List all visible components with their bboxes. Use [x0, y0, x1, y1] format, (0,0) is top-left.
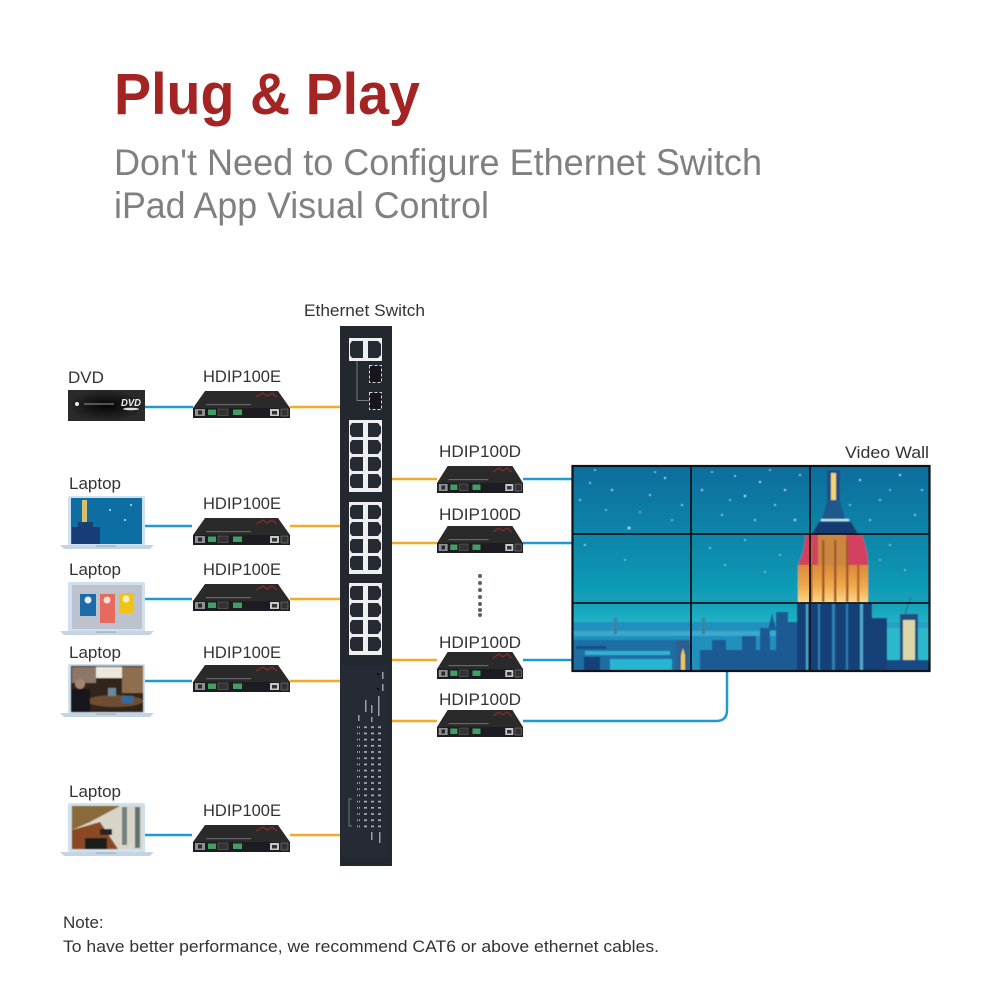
source: Laptop 3: Laptop — [69, 643, 121, 662]
encoder: HDIP100E row 4: HDIP100E — [203, 643, 281, 662]
source: Laptop 2 — [60, 560, 154, 635]
laptop 1 screen — [71, 498, 142, 544]
source: Laptop 1 — [60, 474, 154, 549]
source: DVD — [68, 368, 145, 421]
screen bezels — [572, 466, 930, 671]
decoder: HDIP100D row 3: HDIP100D — [439, 633, 521, 652]
source: Laptop 2: Laptop — [69, 560, 121, 579]
ellipsis dots — [478, 574, 482, 617]
decoder: HDIP100D row 4: HDIP100D — [439, 690, 521, 709]
source: Laptop 3 — [60, 643, 154, 717]
decoder: HDIP100D row 1 — [437, 442, 523, 493]
source: Laptop 4: Laptop — [69, 782, 121, 801]
ethernet switch — [340, 326, 392, 866]
note — [63, 913, 659, 956]
label: DVD: DVD — [68, 368, 104, 387]
title: Plug & Play — [114, 62, 420, 127]
decoder: HDIP100D row 1: HDIP100D — [439, 442, 521, 461]
note: Note: — [63, 913, 104, 932]
encoder: HDIP100E row 1 — [193, 367, 290, 418]
source: Laptop 1: Laptop — [69, 474, 121, 493]
encoder: HDIP100E row 3: HDIP100E — [203, 560, 281, 579]
wall image — [572, 466, 930, 671]
horizon — [572, 622, 812, 671]
SFP ports — [370, 366, 382, 410]
label: Video Wall: Video Wall — [845, 443, 929, 462]
icon: DVD player: DVD — [121, 398, 141, 409]
decoder: HDIP100D row 2: HDIP100D — [439, 505, 521, 524]
video wall — [572, 466, 930, 671]
laptop 3 screen — [71, 666, 143, 712]
skyline — [700, 612, 797, 671]
encoder: HDIP100E row 2: HDIP100E — [203, 494, 281, 513]
encoder: HDIP100E row 2 — [193, 494, 290, 545]
subtitle: Don't Need to Configure Ethernet Switch — [114, 142, 762, 183]
port block 3 — [349, 583, 382, 655]
source connection cables — [143, 407, 727, 835]
encoder: HDIP100E row 5 — [193, 801, 290, 852]
Empire State tower — [797, 470, 872, 671]
note: To have better performance, we recommend CAT6 or above ethernet cables. — [63, 937, 659, 956]
top RJ45 ports — [349, 338, 382, 361]
label: Ethernet Switch: Ethernet Switch — [304, 301, 425, 320]
LED panel — [341, 665, 389, 857]
right buildings — [872, 622, 930, 628]
port block 2 — [349, 502, 382, 574]
decoder: HDIP100D row 2 — [437, 505, 523, 553]
laptop 2 screen — [72, 585, 142, 629]
encoder: HDIP100E row 4 — [193, 643, 290, 692]
subtitle: iPad App Visual Control — [114, 185, 489, 226]
subtitle — [114, 142, 762, 226]
laptop 4 screen — [72, 806, 142, 849]
encoder: HDIP100E row 3 — [193, 560, 290, 611]
source: Laptop 4 — [60, 782, 154, 856]
stars — [579, 469, 923, 573]
encoder: HDIP100E row 1: HDIP100E — [203, 367, 281, 386]
decoder: HDIP100D row 4 — [437, 690, 523, 737]
port block 1 — [349, 420, 382, 492]
encoder: HDIP100E row 5: HDIP100E — [203, 801, 281, 820]
ethernet cables — [290, 407, 437, 835]
decoder: HDIP100D row 3 — [437, 633, 523, 679]
